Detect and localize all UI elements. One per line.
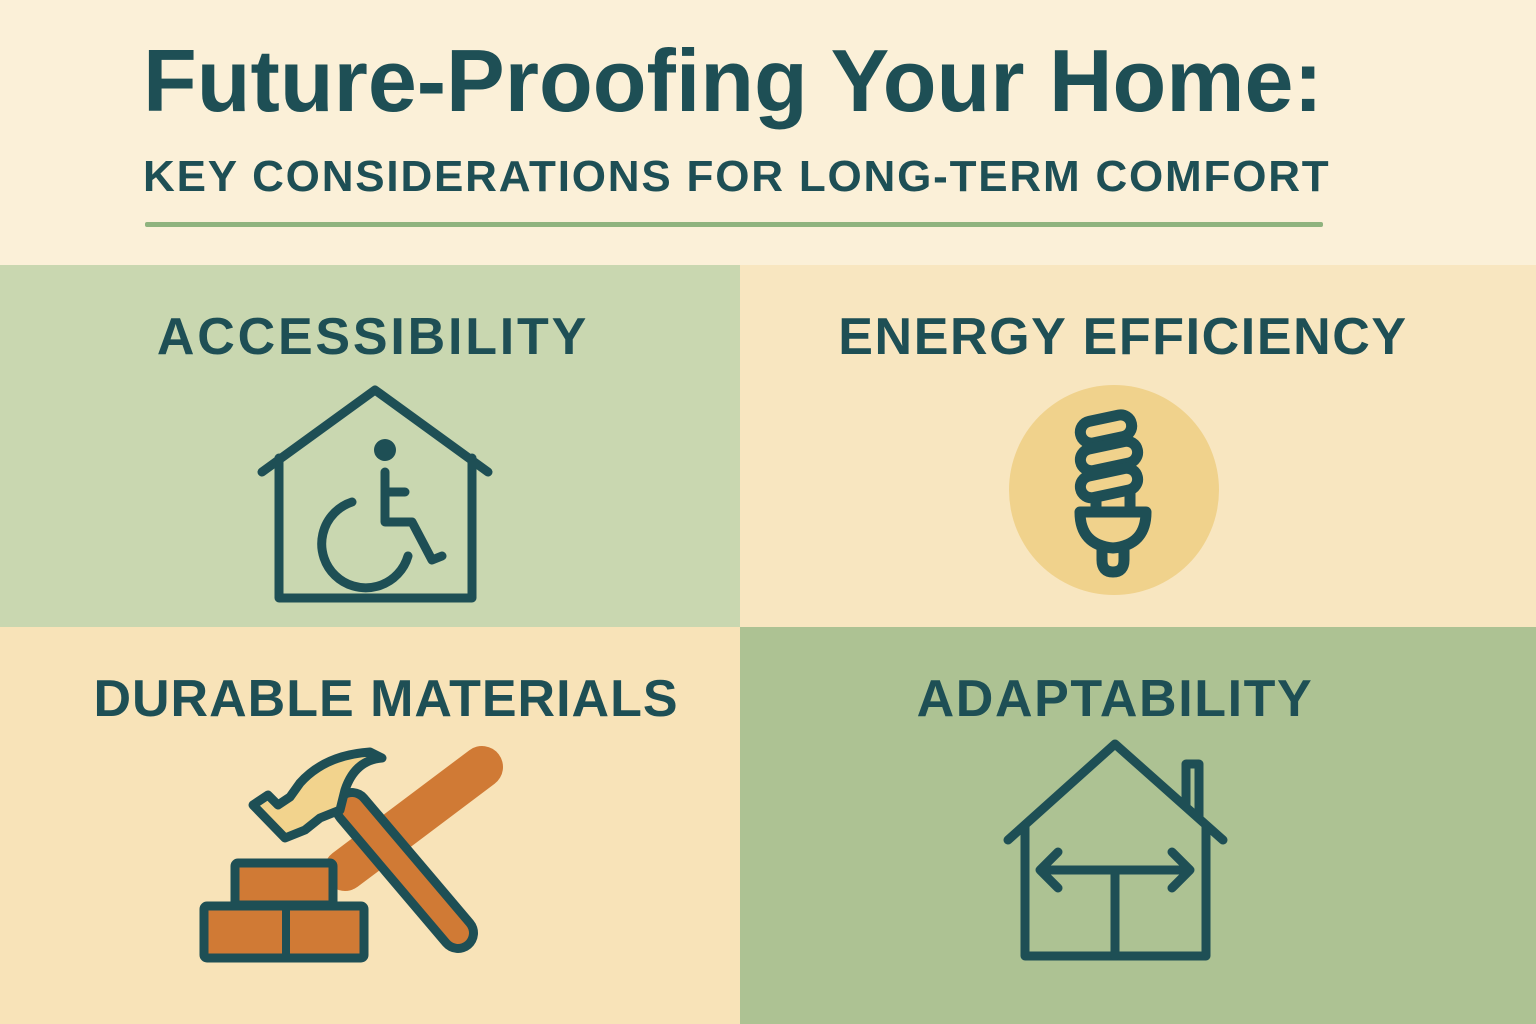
panel: adaptability — [740, 627, 1536, 1024]
heading: accessibility: ACCESSIBILITY — [157, 308, 589, 366]
icon: light bulb — [1009, 385, 1219, 595]
subtitle: KEY CONSIDERATIONS FOR LONG-TERM COMFORT — [143, 152, 1330, 201]
heading: adaptability: ADAPTABILITY — [917, 670, 1313, 728]
icon: adaptable house — [1004, 740, 1228, 960]
panel: accessibility — [0, 265, 740, 627]
icon: hammer and bricks — [200, 746, 503, 962]
icon: house with wheelchair — [258, 385, 492, 602]
panel: durable materials — [0, 627, 740, 1024]
panel: energy efficiency — [740, 265, 1536, 627]
heading: energy efficiency: ENERGY EFFICIENCY — [838, 308, 1408, 366]
heading: durable materials: DURABLE MATERIALS — [93, 670, 679, 728]
title: Future-Proofing Your Home: — [143, 31, 1323, 130]
header — [143, 31, 1330, 227]
